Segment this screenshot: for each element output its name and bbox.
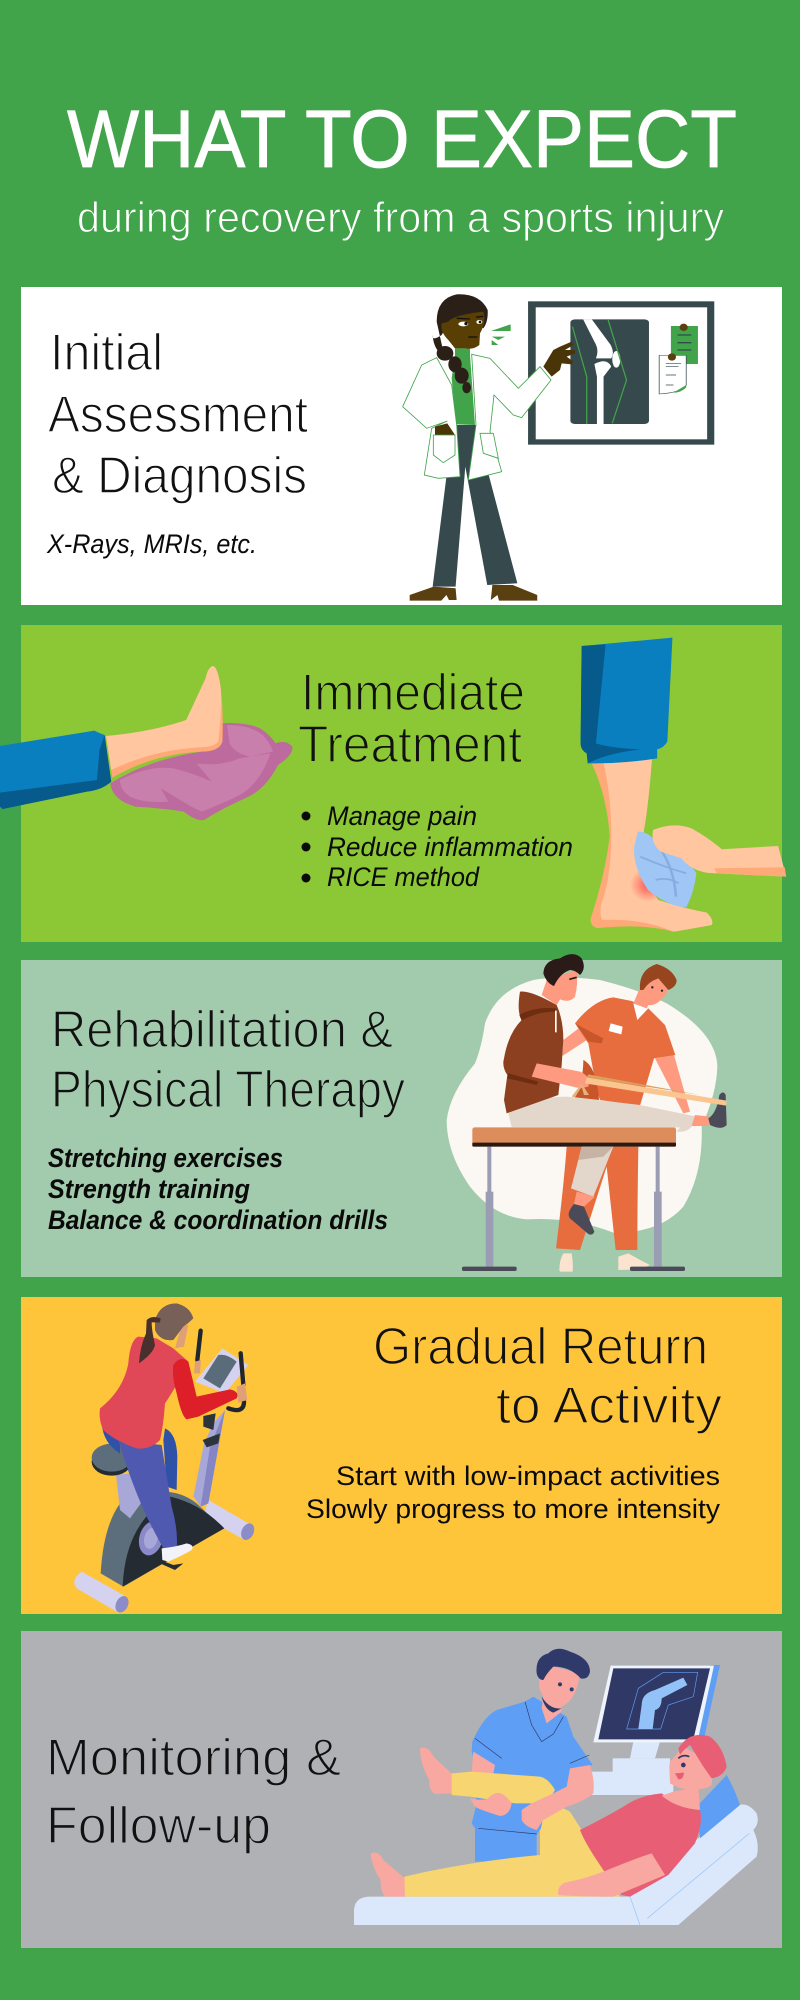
heading: gradual return	[373, 1318, 722, 1435]
patient legs	[371, 1748, 453, 1897]
exercise list: Strength training	[48, 1174, 250, 1204]
therapist arms	[562, 1027, 690, 1113]
panel: rehabilitation	[21, 954, 782, 1277]
heading: immediate treatment: Treatment	[298, 716, 523, 774]
patient torso	[580, 1793, 701, 1897]
therapist head	[633, 971, 667, 1008]
strap	[572, 1083, 589, 1097]
text: progression: Start with low-impact activities	[336, 1461, 720, 1491]
illustration: physical therapy	[447, 954, 727, 1272]
housing	[101, 1492, 223, 1587]
patient head	[669, 1747, 713, 1789]
patient bent leg	[571, 1147, 613, 1197]
console and handles	[195, 1348, 248, 1393]
legs	[102, 1423, 177, 1490]
foot	[106, 666, 223, 778]
patient arm	[558, 1853, 665, 1897]
heading: gradual return: Gradual Return	[373, 1318, 708, 1376]
monitor	[592, 1665, 720, 1795]
front base	[74, 1572, 125, 1613]
panel: gradual return	[21, 1297, 782, 1615]
seat	[116, 1473, 143, 1518]
jacket	[100, 1337, 188, 1449]
shoes	[410, 585, 537, 601]
pillow	[110, 723, 292, 820]
rear base	[203, 1500, 254, 1539]
title: WHAT TO EXPECT	[67, 94, 737, 185]
bullet list: Manage pain	[327, 801, 477, 831]
pants	[433, 425, 517, 587]
trouser	[0, 731, 111, 809]
heading: rehabilitation: Rehabilitation &	[51, 1001, 393, 1059]
post	[193, 1410, 225, 1507]
bed	[354, 1804, 758, 1925]
text: progression	[306, 1461, 721, 1524]
text: progression: Slowly progress to more intensity	[306, 1494, 721, 1524]
illustration: elevated foot on pillow	[0, 638, 786, 932]
swelling	[630, 868, 666, 902]
panel: monitoring	[21, 1631, 782, 1948]
panel: initial assessment	[21, 287, 782, 605]
pillow	[697, 1775, 740, 1838]
heading: immediate treatment	[298, 664, 525, 774]
therapist torso	[575, 997, 675, 1106]
hand	[653, 825, 786, 877]
heading: monitoring: Monitoring &	[46, 1729, 341, 1787]
shorts	[581, 638, 672, 763]
heading: monitoring	[46, 1729, 341, 1855]
text: tests: X-Rays, MRIs, etc.	[46, 529, 257, 559]
subtitle: during recovery from a sports injury	[77, 194, 724, 242]
heading: gradual return: to Activity	[496, 1377, 722, 1435]
standing leg	[591, 758, 712, 932]
exercise list: Stretching exercises	[48, 1143, 283, 1173]
pedal and shoe	[160, 1560, 183, 1570]
exercise list	[48, 1143, 388, 1235]
therapist	[472, 1697, 593, 1862]
ice pack	[634, 832, 696, 907]
bullet list: RICE method	[327, 862, 480, 892]
therapist legs	[556, 1147, 638, 1250]
illustration: follow-up exam	[354, 1649, 758, 1925]
bullet list: Reduce inflammation	[327, 832, 573, 862]
heading: initial assessment	[48, 324, 308, 505]
panel: immediate treatment	[0, 625, 786, 942]
illustration: doctor with x-ray	[403, 294, 714, 601]
bench	[462, 1127, 685, 1271]
head	[175, 1325, 188, 1348]
heading: rehabilitation	[51, 1001, 405, 1119]
exercise list: Balance & coordination drills	[48, 1205, 388, 1235]
heading: initial assessment: Initial	[50, 324, 163, 382]
heading: initial assessment: Assessment	[48, 386, 308, 444]
illustration: exercise bike	[74, 1303, 257, 1615]
patient head	[542, 970, 577, 1005]
backdrop blob	[447, 977, 717, 1233]
heading: immediate treatment: Immediate	[301, 664, 525, 722]
bullet list	[302, 801, 573, 892]
patient arm	[532, 1063, 589, 1088]
x-ray frame	[528, 301, 714, 445]
patient hoodie	[503, 991, 563, 1113]
heading: initial assessment: & Diagnosis	[52, 447, 307, 505]
arm	[173, 1359, 237, 1419]
heading: rehabilitation: Physical Therapy	[51, 1061, 405, 1119]
patient extended leg	[508, 1097, 697, 1132]
heading: monitoring: Follow-up	[46, 1797, 271, 1855]
doctor upper body	[403, 294, 575, 480]
